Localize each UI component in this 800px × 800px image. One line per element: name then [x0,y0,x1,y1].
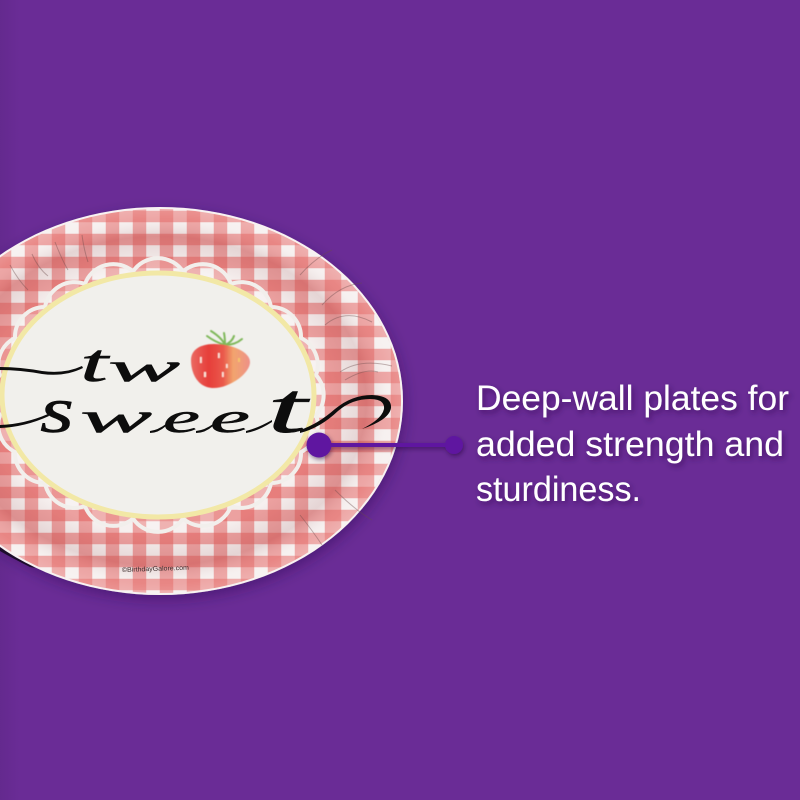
callout pointer [306,432,463,458]
strawberry leaves [207,331,242,345]
script text: two sweet: e [163,396,200,442]
script text: two sweet: t [267,368,311,448]
yellow ring and white centre [2,273,314,517]
script text: two sweet [40,333,311,448]
copyright text: ©BirthdayGalore.com [122,564,190,574]
script text: two sweet: s [40,374,74,447]
white lace scallop border [0,258,324,532]
callout text: added strength and [476,425,784,464]
plate [0,207,403,595]
plate wall creases [10,235,392,545]
plate rim with gingham [0,207,403,595]
strawberry [191,331,250,388]
callout text: Deep-wall plates for [476,379,789,418]
script text: two sweet: w [108,345,181,390]
script text: two sweet: e [210,396,250,442]
plate shadow sliver [0,547,36,568]
script flourishes [0,366,391,433]
callout text [476,379,789,509]
script text: two sweet: t [80,333,112,393]
callout text: sturdiness. [476,470,641,509]
script text: two sweet: w [80,396,152,442]
